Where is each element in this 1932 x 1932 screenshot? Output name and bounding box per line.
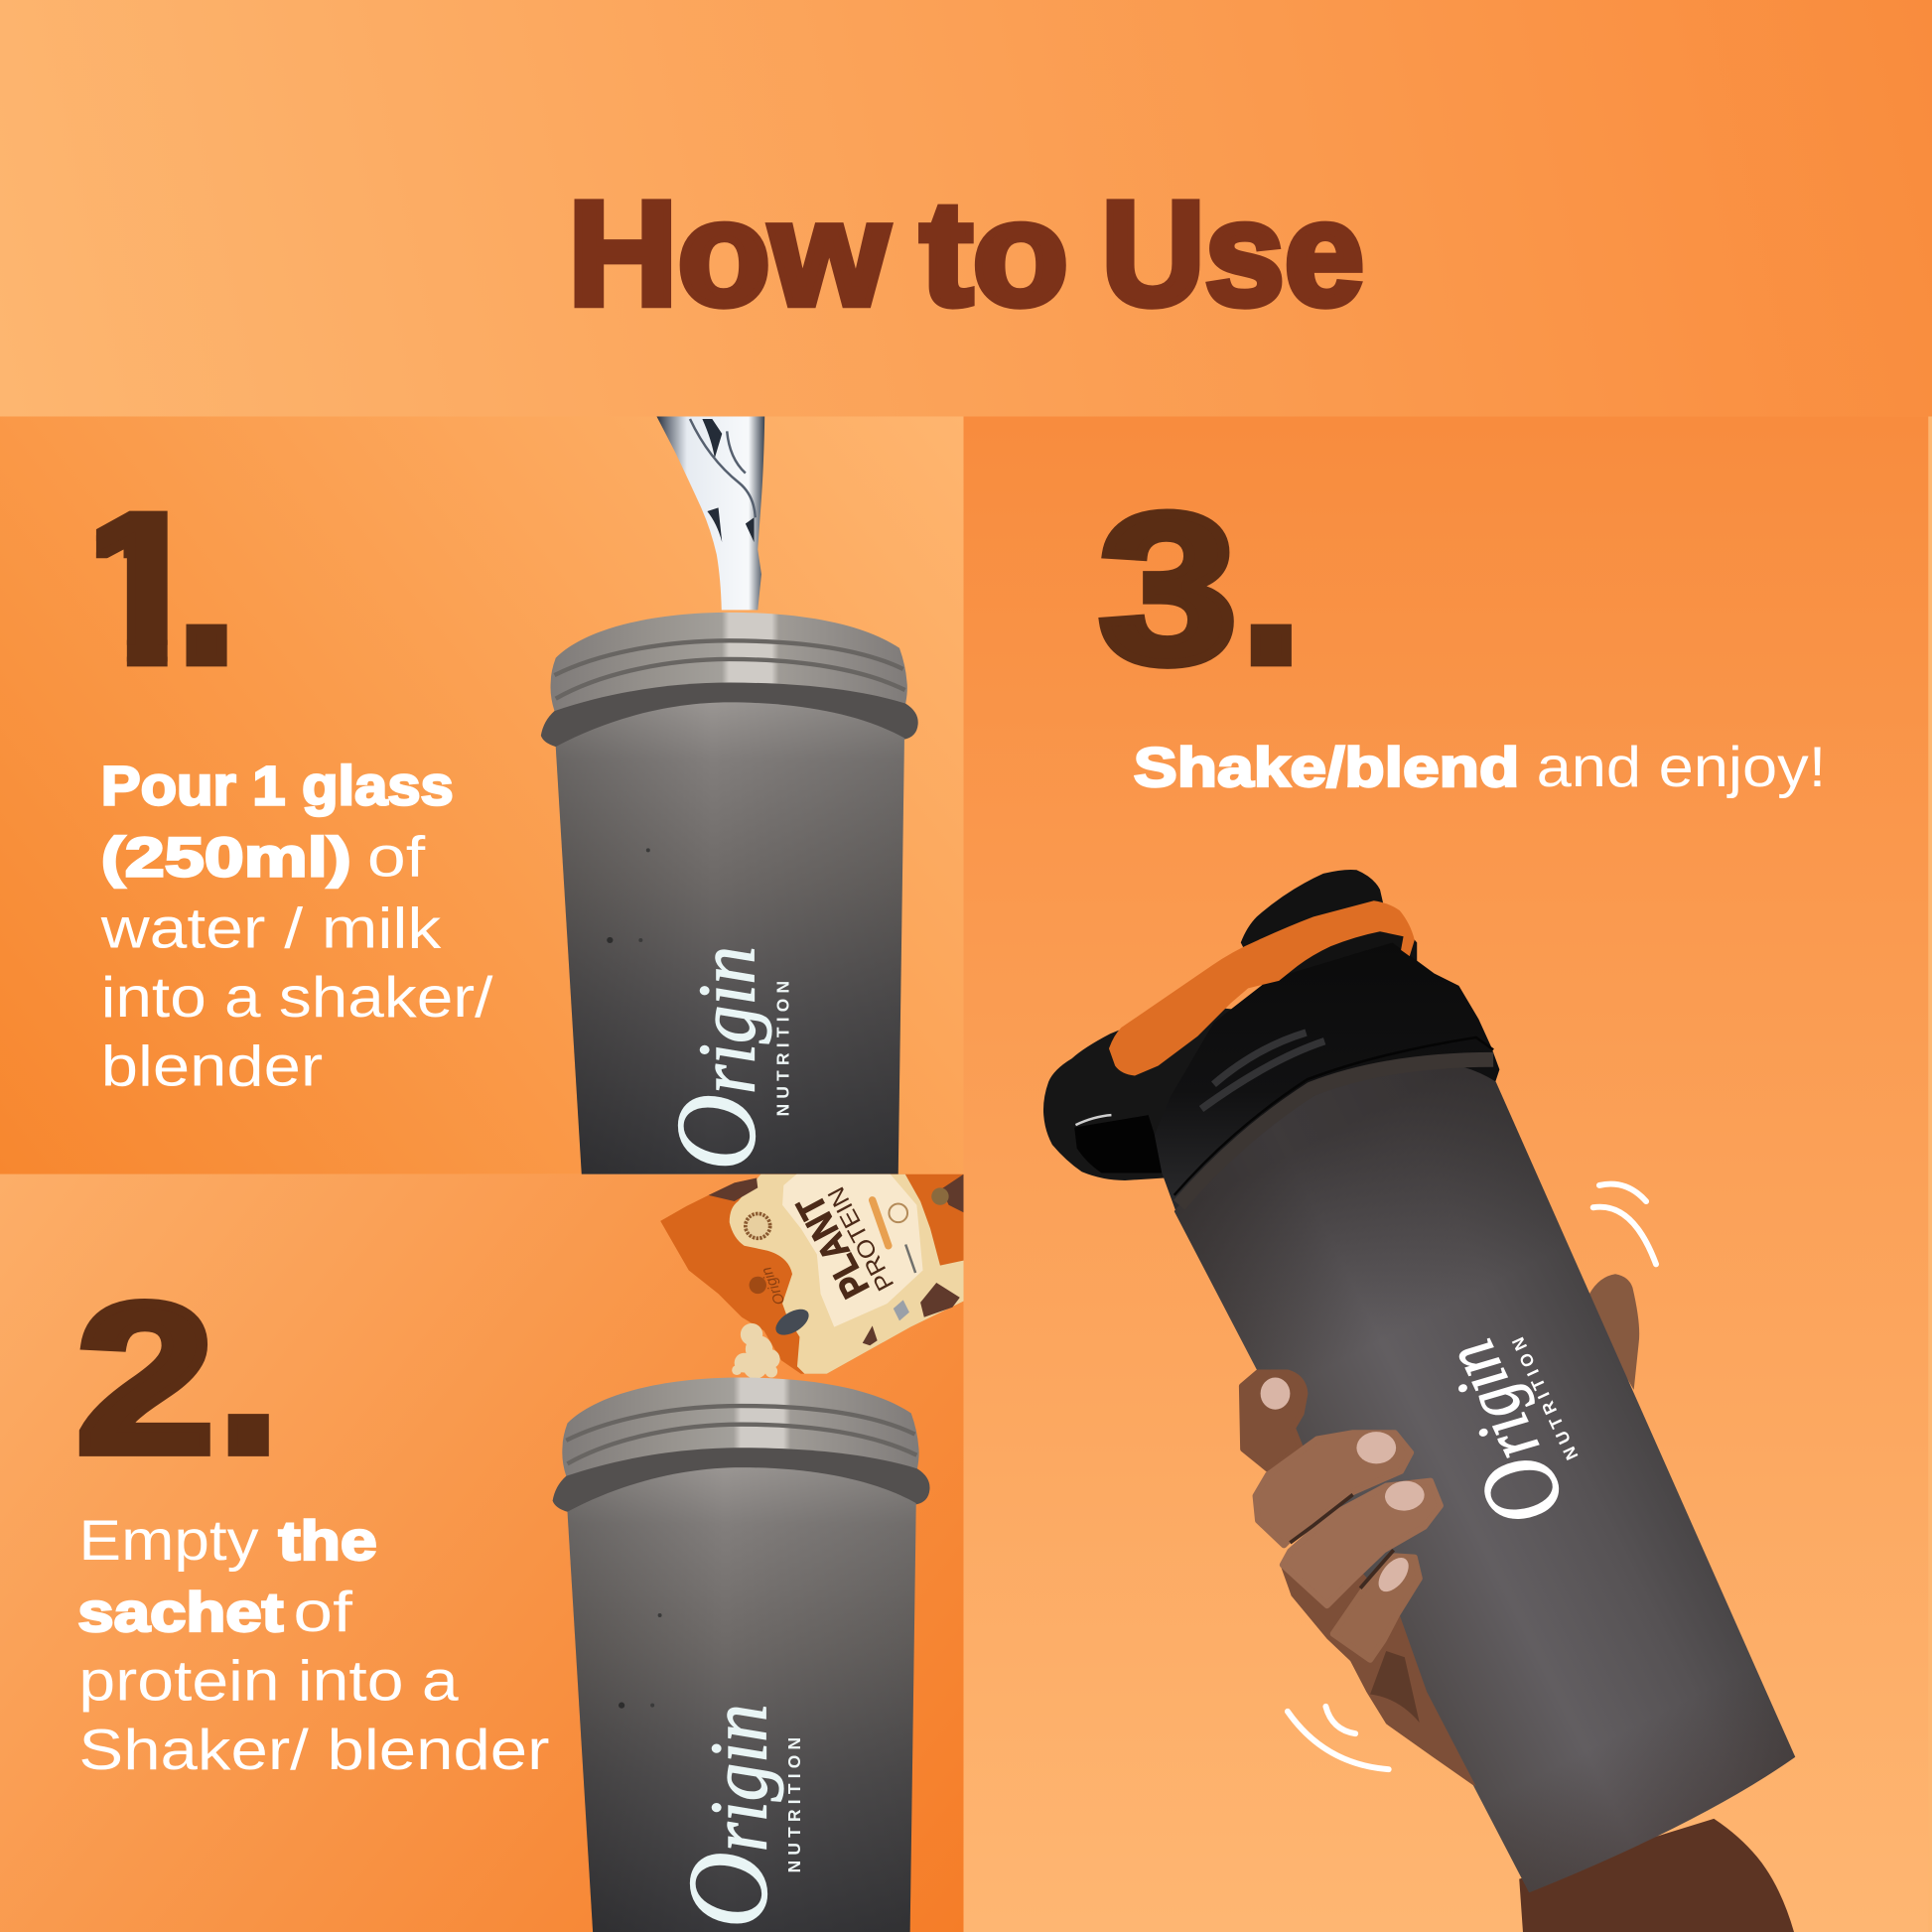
step 1 number: 1: [71, 471, 209, 707]
step 3 text: and enjoy!: [1537, 736, 1826, 799]
step 2 text: protein into a: [78, 1650, 459, 1714]
step 1 text: water / milk: [100, 897, 442, 960]
title: [568, 171, 1364, 337]
bottle body: [568, 1467, 916, 1932]
icon: shake motion lines top right: [1593, 1184, 1656, 1264]
step 1 text: [100, 754, 493, 1098]
step 1 text: (250ml): [101, 825, 351, 888]
palm: [1280, 1565, 1476, 1787]
step 3 text: Shake/blend: [1134, 736, 1519, 798]
sachet berry: [775, 1309, 809, 1335]
sachet banner: [873, 1200, 889, 1246]
step 1 text: Pour 1 glass: [101, 754, 454, 816]
shaker bottle: step 3: [1043, 870, 1795, 1892]
shaker bottle: step 1: [541, 613, 918, 1174]
panel: header background: [0, 0, 1932, 416]
step 2 number: [76, 1253, 279, 1498]
panel: step 2 background: [0, 1174, 964, 1932]
step 2 text: the: [278, 1509, 377, 1572]
step 2 number: 2: [76, 1261, 214, 1497]
logo: Origin: Origin: [664, 1704, 790, 1928]
finger two: [1256, 1433, 1411, 1545]
step 3 number: .: [1241, 463, 1302, 708]
step 1 number: [95, 510, 227, 667]
bottle rim and threads: [562, 1378, 919, 1476]
step 2 number: .: [218, 1253, 279, 1498]
bottle rim and threads: [551, 613, 907, 711]
logo: Origin: Origin: [653, 946, 779, 1171]
sachet light panel: [782, 1171, 923, 1327]
sachet bag: [660, 1171, 964, 1374]
icon: protein sachet: [660, 1171, 964, 1374]
logo: Origin: Origin: [1404, 1325, 1588, 1545]
step 1 text: into a shaker/: [101, 966, 493, 1030]
step 2 text: Empty: [78, 1509, 259, 1573]
step 2 text: Shaker/ blender: [78, 1719, 550, 1782]
sachet heading: PLANT: PLANT: [788, 1187, 878, 1305]
finger three: [1283, 1481, 1441, 1605]
bottle flange: [553, 1448, 929, 1512]
sachet small mark: [750, 1277, 766, 1294]
logo: Nutrition: NUTRITION: [772, 981, 792, 1116]
sachet heading: PROTEIN: PROTEIN: [823, 1182, 899, 1295]
bottle lid: [1155, 942, 1499, 1213]
logo: Nutrition: NUTRITION: [1508, 1334, 1582, 1463]
bottle flange: [541, 683, 918, 747]
icon: shake motion lines bottom left: [1288, 1707, 1389, 1769]
step 3 number: [1099, 463, 1302, 708]
step 1 number: .: [176, 463, 237, 708]
fingernails: [1261, 1378, 1426, 1597]
bottle body: [556, 702, 904, 1174]
icon: protein powder: [732, 1323, 780, 1379]
step 2 text: of: [293, 1581, 352, 1644]
bottle strap: [1109, 900, 1415, 1075]
step 2 text: sachet: [77, 1581, 283, 1643]
step 1 text: of: [367, 825, 425, 889]
bottle cap: [1241, 870, 1417, 998]
step 1 text: blender: [101, 1035, 323, 1098]
sachet cream label: [730, 1171, 964, 1374]
panel: step 1 background: [0, 416, 964, 1174]
title: to: [920, 171, 1068, 337]
icon: water stream: [656, 416, 764, 610]
bottle handle loop: [1043, 1004, 1244, 1180]
sachet badge: [889, 1204, 907, 1222]
icon: gripping hand: [1242, 1373, 1476, 1787]
step 3 text: [1134, 736, 1826, 799]
sachet small logo: Origin: [759, 1265, 788, 1307]
step 3 number: 3: [1099, 471, 1237, 707]
bottle body: [1174, 1062, 1795, 1892]
title: Use: [1102, 171, 1364, 337]
finger four: [1333, 1556, 1420, 1660]
shaker bottle: step 2: [553, 1378, 929, 1932]
title: How: [568, 171, 890, 337]
icon: arm and thumb behind bottle: [1282, 1274, 1794, 1932]
panel: step 3 background: [964, 416, 1928, 1932]
logo: Nutrition: NUTRITION: [784, 1737, 804, 1872]
bottle handle opening: [1074, 1115, 1162, 1173]
sachet seal: [746, 1213, 770, 1238]
finger one: [1242, 1373, 1305, 1470]
step 2 text: [77, 1509, 550, 1782]
sachet chocolate pieces: [709, 1174, 964, 1345]
